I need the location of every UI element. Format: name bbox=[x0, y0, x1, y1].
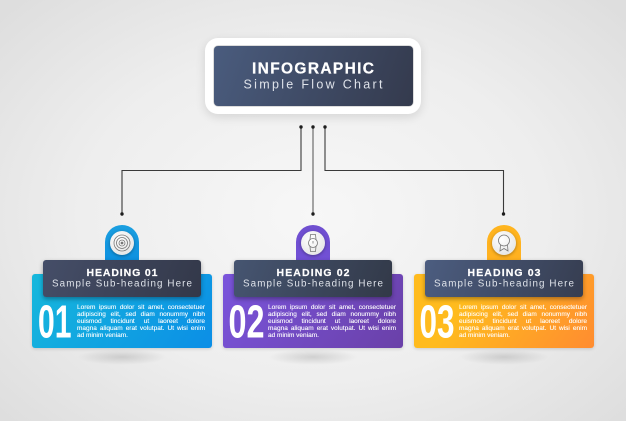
body text bbox=[459, 304, 587, 339]
heading bar: HEADING 03 bbox=[468, 267, 541, 279]
shadow bbox=[268, 349, 358, 365]
body text: Lorem ipsum dolor sit amet, consectetuer bbox=[459, 304, 587, 310]
icon tab bbox=[487, 225, 521, 265]
body text: ad minim veniam. bbox=[459, 332, 510, 339]
heading bar: Sample Sub-heading Here bbox=[52, 278, 193, 290]
body text: magna aliquam erat volutpat. Ut wisi enim bbox=[77, 325, 205, 332]
panel body bbox=[414, 274, 594, 348]
number 02: 02 bbox=[228, 296, 264, 348]
heading bar: Sample Sub-heading Here bbox=[434, 278, 575, 290]
heading bar: HEADING 01 bbox=[86, 267, 158, 279]
panel body bbox=[32, 274, 212, 348]
title text: Simple Flow Chart bbox=[244, 78, 383, 92]
shadow bbox=[77, 349, 167, 365]
number 03: 03 bbox=[420, 296, 454, 348]
panel: step 02 bbox=[222, 225, 404, 362]
body text: magna aliquam erat volutpat. Ut wisi enim bbox=[268, 325, 396, 332]
body text: euismod tincidunt ut laoreet dolore bbox=[459, 318, 587, 325]
body text: adipiscing elit, sed diam nonummy nibh bbox=[77, 311, 205, 318]
body text: magna aliquam erat volutpat. Ut wisi enim bbox=[459, 325, 587, 332]
icon: target bbox=[110, 231, 134, 255]
icon: watch bbox=[301, 231, 325, 255]
icon tab bbox=[296, 225, 330, 265]
body text: adipiscing elit, sed diam nonummy nibh bbox=[459, 311, 587, 318]
body text bbox=[77, 304, 205, 339]
panel: step 03 bbox=[413, 225, 595, 362]
body text: Lorem ipsum dolor sit amet, consectetuer bbox=[77, 304, 205, 310]
panel body bbox=[223, 274, 403, 348]
heading bar: HEADING 02 bbox=[276, 267, 350, 279]
title text: INFOGRAPHIC bbox=[252, 60, 374, 78]
body text: euismod tincidunt ut laoreet dolore bbox=[268, 318, 396, 325]
body text: adipiscing elit, sed diam nonummy nibh bbox=[268, 311, 396, 318]
body text: ad minim veniam. bbox=[77, 332, 128, 339]
panel: step 01 bbox=[31, 225, 213, 362]
body text: Lorem ipsum dolor sit amet, consectetuer bbox=[268, 304, 396, 310]
number 01: 01 bbox=[38, 296, 72, 348]
body text bbox=[268, 304, 396, 339]
title box bbox=[205, 38, 421, 114]
icon: award ribbon bbox=[492, 231, 516, 255]
body text: euismod tincidunt ut laoreet dolore bbox=[77, 318, 205, 325]
heading bar: Sample Sub-heading Here bbox=[243, 278, 384, 290]
body text: ad minim veniam. bbox=[268, 332, 319, 339]
icon tab bbox=[105, 225, 139, 265]
heading bar bbox=[43, 260, 201, 297]
title text bbox=[244, 60, 383, 92]
heading bar bbox=[234, 260, 392, 297]
heading bar bbox=[425, 260, 583, 297]
shadow bbox=[459, 349, 549, 365]
